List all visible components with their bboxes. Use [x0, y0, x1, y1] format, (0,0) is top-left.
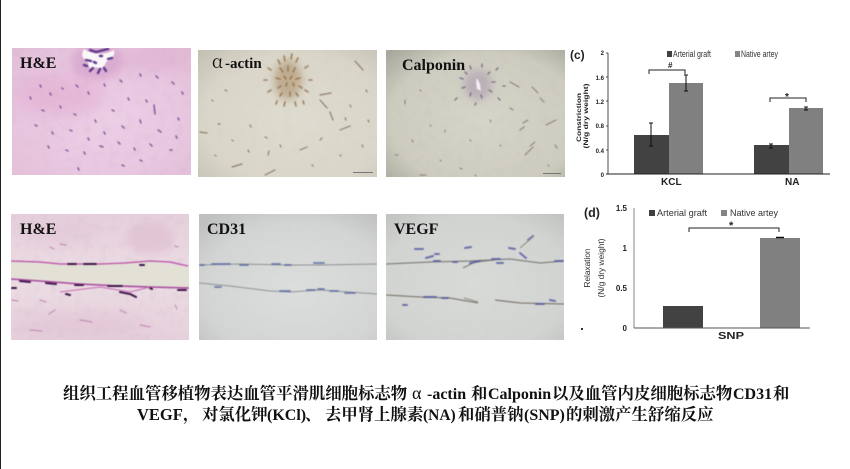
label: H&E (second row): H&E [20, 221, 56, 238]
y axis: relaxation: 1.5 [616, 204, 628, 213]
legend: constriction chart: Native artey [741, 49, 778, 59]
caption text: 和 [471, 384, 487, 403]
label: Calponin: Calponin [402, 57, 465, 74]
y axis: relaxation: 0.5 [616, 284, 628, 293]
label: alpha-actin: -actin [225, 56, 262, 72]
y axis: relaxation: 1 [623, 244, 628, 253]
bar: native artery SNP [760, 238, 800, 328]
y axis: constriction: 2 [601, 51, 605, 57]
bar: arterial graft SNP [663, 306, 703, 328]
panel: H&E graft section, top row [5, 44, 191, 177]
panel: alpha-actin stained section [198, 50, 377, 177]
legend: constriction chart [667, 49, 778, 59]
panel: Calponin stained section [386, 50, 565, 177]
y axis: relaxation: (N/g dry weight) [596, 238, 606, 298]
bars: KCL: # [668, 61, 673, 70]
caption text: 、 [305, 405, 321, 424]
legend: relaxation chart: Arterial graft [657, 208, 708, 218]
caption text: CD31 [733, 386, 772, 403]
caption text: Calponin [488, 386, 551, 403]
y axis: constriction [576, 51, 608, 179]
label: CD31: CD31 [207, 221, 246, 238]
bars: KCL: KCL [661, 177, 682, 188]
legend: constriction chart: Arterial graft [673, 49, 711, 59]
y axis: constriction: (N/g dry weight) [583, 84, 590, 148]
significance bracket: * [729, 220, 734, 232]
panel tag d: (d) [584, 206, 600, 220]
panel: VEGF stained section [386, 214, 564, 340]
y axis: constriction: 0.4 [596, 149, 605, 155]
bars: NA [754, 92, 823, 188]
label: H&E: H&E [20, 55, 56, 72]
caption text: 组织工程血管移植物表达血管平滑肌细胞标志物 [63, 384, 408, 403]
caption text: 对氯化钾 [202, 405, 268, 424]
y axis: relaxation: 0 [623, 324, 628, 333]
caption text: VEGF [137, 405, 183, 424]
y axis: constriction: 1.2 [596, 100, 605, 106]
caption text: (NA) [423, 407, 456, 424]
caption text: (KCl) [267, 407, 306, 424]
y axis: constriction: 0 [601, 173, 605, 179]
caption text: 以及血管内皮细胞标志物 [552, 384, 733, 403]
label: VEGF: VEGF [394, 221, 439, 238]
panel: H&E section with lumen, bottom row [10, 214, 189, 340]
label: alpha-actin: α [212, 48, 223, 74]
lumen opening with dark nuclei [82, 49, 114, 68]
legend: relaxation chart [649, 208, 779, 218]
caption text: 的刺激产生舒缩反应 [566, 405, 714, 424]
x label SNP: SNP [718, 330, 744, 342]
chart: relaxation bar chart (d) [581, 204, 810, 342]
y axis: constriction: 0.8 [596, 124, 605, 130]
caption text: 和 [773, 384, 789, 403]
panel tag c: (c) [570, 48, 585, 62]
chart: constriction bar chart (c) [570, 48, 830, 188]
caption text: 去甲肾上腺素 [325, 405, 424, 424]
y axis: constriction: Constriction [576, 93, 583, 142]
bars: KCL [634, 61, 703, 188]
caption text: ， [183, 405, 199, 425]
caption text: α [412, 383, 422, 403]
bars: NA: * [785, 92, 789, 103]
caption text: (SNP) [524, 407, 565, 424]
bars: NA: NA [785, 177, 799, 188]
panel: CD31 stained section [199, 214, 377, 340]
caption text: -actin [427, 386, 466, 403]
y axis: constriction: 1.6 [596, 76, 605, 82]
legend: relaxation chart: Native artey [730, 208, 779, 218]
significance bracket [689, 220, 784, 238]
caption text: 和硝普钠 [458, 405, 524, 424]
y axis: relaxation [582, 204, 634, 333]
y axis: relaxation: Relaxation [582, 248, 592, 288]
caption text [63, 383, 789, 425]
